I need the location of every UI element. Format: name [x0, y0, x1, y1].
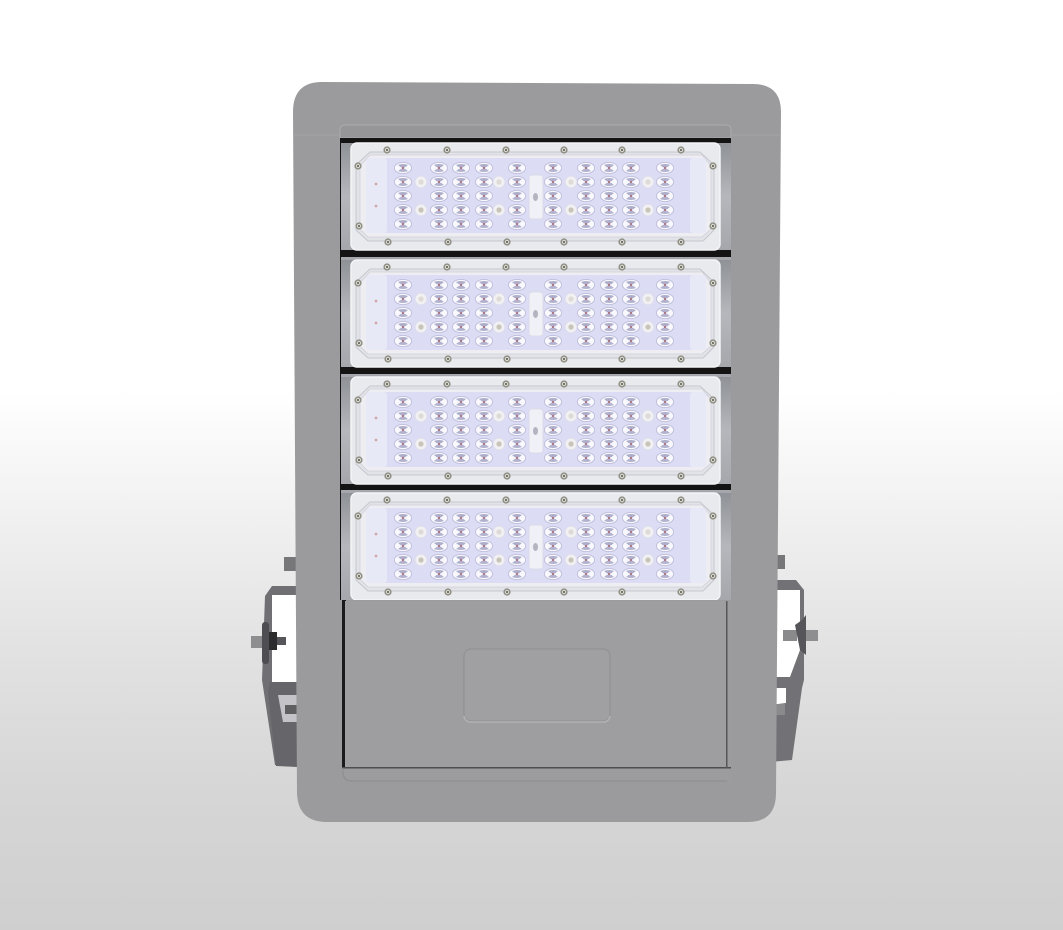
right mounting bracket	[770, 555, 818, 762]
label plate recess	[464, 649, 610, 721]
top recess	[340, 125, 731, 138]
LED module 3	[341, 374, 731, 484]
LED module 2	[341, 257, 731, 367]
LED module 1	[341, 143, 731, 250]
driver box cover	[340, 600, 731, 782]
left mounting bracket	[251, 557, 298, 767]
black gaps between modules	[340, 138, 731, 601]
luminaire housing	[293, 82, 781, 822]
LED module 4	[341, 490, 731, 600]
